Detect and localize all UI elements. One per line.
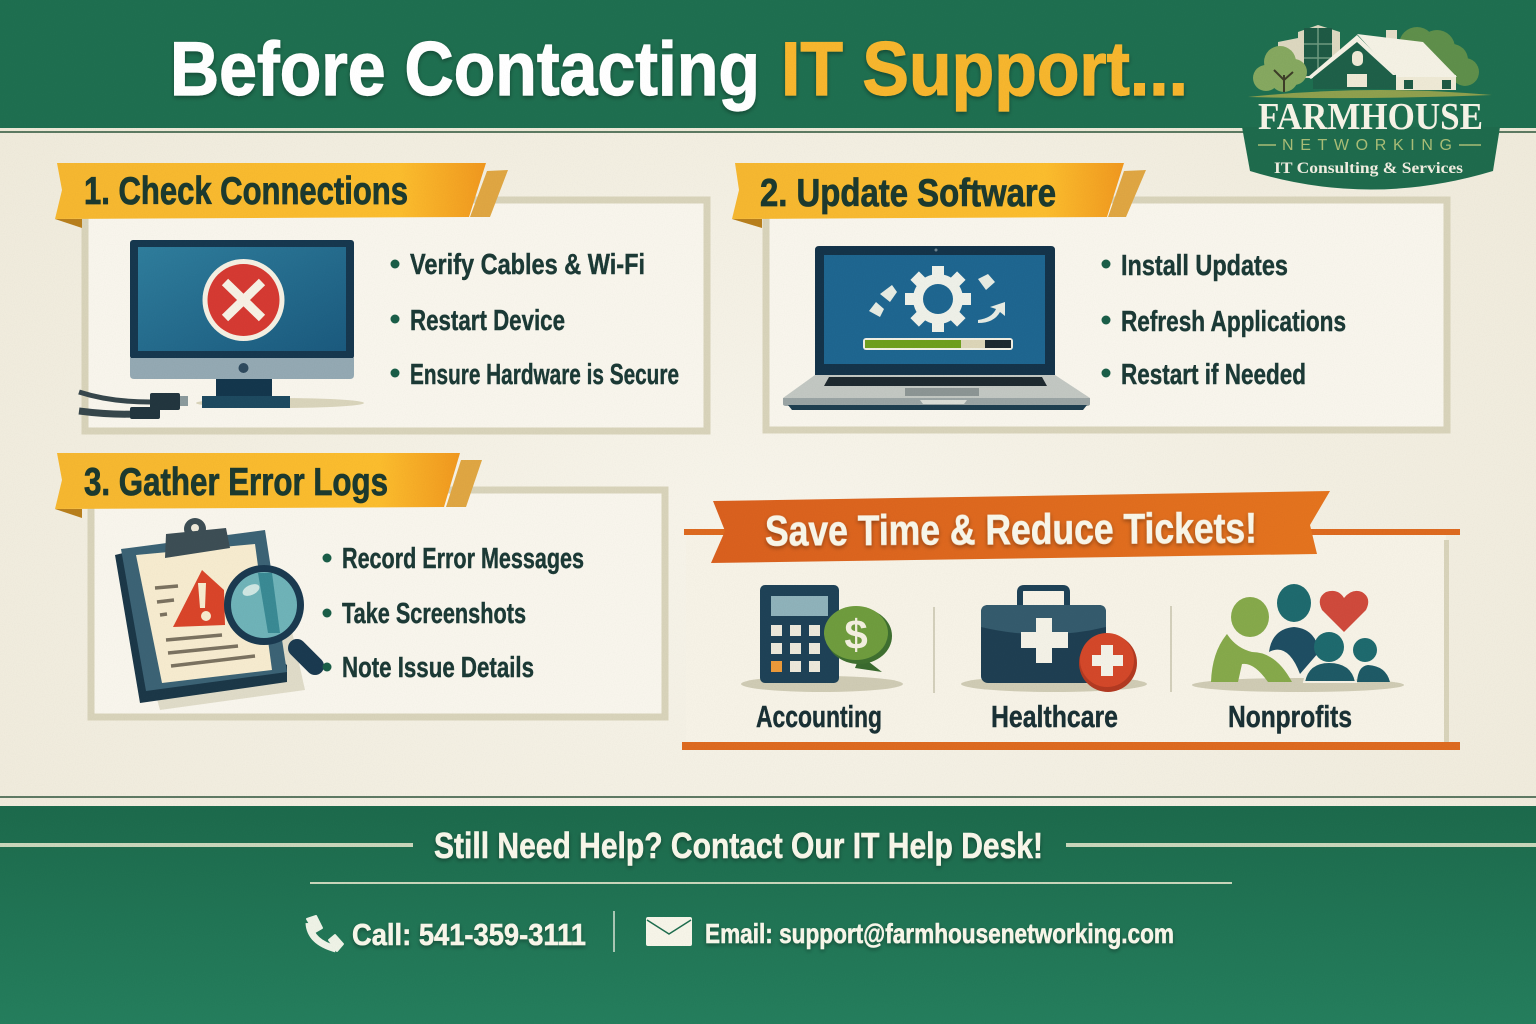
contact: phone [307,916,586,952]
panel borders [682,529,1460,750]
logo barn [1308,30,1457,90]
label: healthcare: Healthcare [991,699,1118,734]
bullet list [1102,250,1346,391]
bullet list: Take Screenshots [342,598,526,630]
logo tree left [1253,46,1307,92]
banner text: Save Time & Reduce Tickets! [765,504,1257,555]
logo ground [1248,90,1492,98]
icon: calculator with dollar: $ [844,611,868,658]
icon: clipboard with warning and magnifier [115,518,315,710]
label: accounting: Accounting [756,699,882,734]
bullet list: Verify Cables & Wi-Fi [410,249,645,281]
logo tagline: IT Consulting & Services [1274,160,1463,177]
bullet list: Ensure Hardware is Secure [410,359,679,391]
progress bar [863,338,1013,350]
icon: nonprofit people and heart [1192,584,1404,692]
label: nonprofits: Nonprofits [1228,699,1352,734]
heading: 2. Update Software [760,172,1056,215]
bullet list: Record Error Messages [342,543,584,575]
gear [905,266,971,332]
logo trees right [1399,27,1479,86]
heading: 1. Check Connections [84,170,408,213]
refresh arrows [869,274,1005,323]
title: IT Support... [781,27,1188,112]
dividers [934,606,1171,693]
bullet list [322,543,584,684]
icon: calculator with dollar [741,585,903,692]
panel frame [766,200,1447,430]
bullet list: Refresh Applications [1121,306,1346,338]
panel: 3 gather error logs [55,453,665,717]
icon: medical briefcase [961,588,1147,692]
panel: 2 update software [732,163,1447,430]
text lines [155,586,255,666]
icon: laptop with gear [783,246,1090,410]
footer heading: Still Need Help? Contact Our IT Help Desk! [434,825,1043,866]
header band [0,0,1536,133]
icon: phone [307,916,343,951]
logo wordmark: FARMHOUSE [1258,96,1483,138]
panel frame [85,200,707,431]
logo: Farmhouse Networking [1242,25,1500,190]
bullet list: Note Issue Details [342,652,534,684]
ribbon [55,453,482,518]
bullet list: Restart if Needed [1121,359,1306,391]
clip [165,518,230,558]
panel background [686,533,1446,743]
magnifier [224,565,315,666]
contact: email [646,917,1174,949]
email address: Email: support@farmhousenetworking.com [705,918,1174,949]
heading: 3. Gather Error Logs [84,461,388,504]
banner [711,491,1330,563]
icon: envelope [646,917,692,946]
phone number: Call: 541-359-3111 [352,917,586,952]
ribbon [732,163,1146,228]
icon: cables [79,392,188,419]
logo subtitle: NETWORKING [1282,137,1452,154]
bullet list: Restart Device [410,305,565,337]
title [170,27,1188,112]
logo silo building [1278,25,1340,78]
icon: monitor with error [130,240,364,408]
logo shield [1242,127,1500,190]
bullet list: Install Updates [1121,250,1288,282]
bullet list [390,249,679,391]
panel: save time and reduce tickets [682,491,1460,750]
contact divider [613,911,615,952]
title: Before Contacting [170,27,760,112]
ribbon [55,163,508,228]
panel frame [91,490,665,717]
warning triangle [173,570,225,627]
footer band [0,796,1536,1024]
panel: 1 check connections [55,163,707,431]
